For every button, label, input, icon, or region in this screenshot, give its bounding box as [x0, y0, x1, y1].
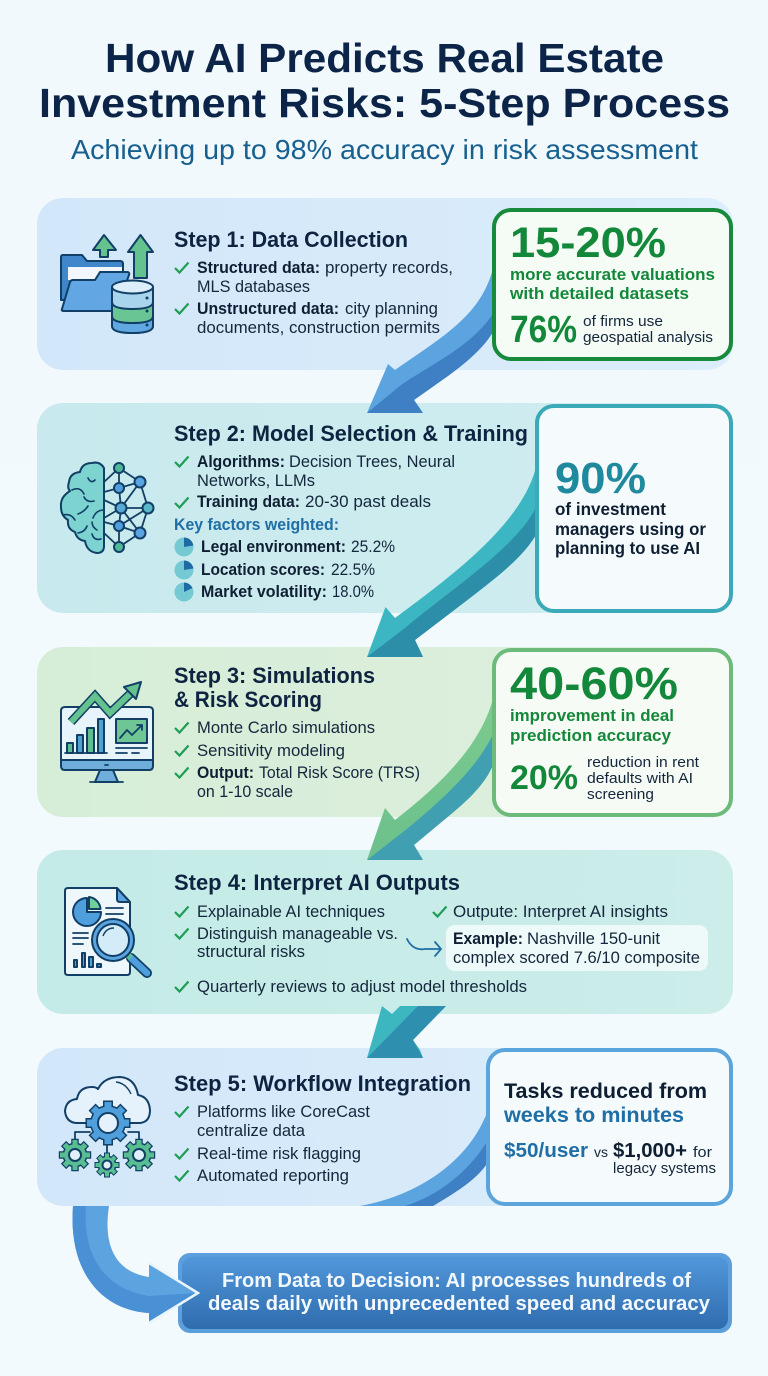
- bullet list: MLS databases: [197, 278, 310, 296]
- key factors list with pie icons: Legal environment:: [201, 538, 346, 556]
- bullet list: Total Risk Score (TRS): [259, 764, 420, 782]
- bullet list: Automated reporting: [197, 1167, 349, 1185]
- subtitle: Achieving up to 98% accuracy in risk assessment: [71, 134, 698, 165]
- callout: Nashville example: Example:: [453, 930, 523, 948]
- bullet list: Platforms like CoreCast: [197, 1103, 370, 1121]
- key factors list with pie icons: 22.5%: [331, 561, 375, 579]
- bullet list: Networks, LLMs: [197, 472, 315, 490]
- stat card: 15-20% valuations: 76%: [510, 309, 577, 351]
- icon: brain and neural network: [61, 463, 154, 553]
- heading: Step 4: Interpret AI Outputs: [174, 870, 460, 895]
- bullet list: [175, 1103, 370, 1185]
- panel: step 3 simulations: [37, 647, 733, 817]
- stat card: weeks to minutes: $1,000+: [613, 1140, 687, 1162]
- arrow: step 2 to step 3: [367, 463, 537, 657]
- bullet list: on 1-10 scale: [197, 783, 293, 801]
- bullet list: [175, 903, 668, 996]
- icon: report with magnifier: [65, 888, 147, 975]
- heading: & Risk Scoring: [174, 687, 322, 712]
- heading: Step 1: Data Collection: [174, 227, 408, 252]
- bullet list: Output:: [197, 764, 254, 782]
- arrow: step 3 to step 4: [367, 695, 494, 860]
- stat card: 90% of managers: [537, 406, 731, 611]
- bullet list: Quarterly reviews to adjust model thresholds: [197, 978, 527, 996]
- bullet list: Training data:: [197, 493, 300, 511]
- arrow: to example: [407, 939, 441, 956]
- key factors list with pie icons: Market volatility:: [201, 583, 327, 601]
- heading: Step 3: Simulations: [174, 663, 375, 688]
- bullet list: Sensitivity modeling: [197, 742, 345, 760]
- arrow: step 1 to step 2: [367, 265, 494, 413]
- stat card: weeks to minutes: Tasks reduced from: [504, 1079, 707, 1103]
- stat card: 40-60% prediction accuracy: screening: [587, 786, 654, 803]
- bullet list: Outpute: Interpret AI insights: [453, 903, 668, 921]
- bullet list: Distinguish manageable vs.: [197, 925, 398, 943]
- title: [39, 35, 730, 126]
- key factors list with pie icons: 18.0%: [332, 583, 374, 601]
- stat card: weeks to minutes: $50/user: [504, 1140, 588, 1162]
- stat card: 90% of managers: of investment: [555, 499, 666, 519]
- stat card: 40-60% prediction accuracy: prediction accuracy: [510, 726, 672, 745]
- bullet list: centralize data: [197, 1122, 306, 1140]
- callout: Nashville example: [446, 925, 708, 971]
- stat card: 15-20% valuations: of firms use: [583, 313, 663, 330]
- stat card: weeks to minutes: [488, 1050, 731, 1204]
- panel: step 4 interpret outputs: [37, 850, 733, 1014]
- stat card: weeks to minutes: vs: [594, 1144, 608, 1160]
- callout: Nashville example: Nashville 150-unit: [527, 930, 660, 948]
- stat card: 15-20% valuations: more accurate valuations: [510, 265, 715, 284]
- stat card: 40-60% prediction accuracy: 40-60%: [510, 658, 678, 709]
- conclusion banner: deals daily with unprecedented speed and accuracy: [208, 1292, 711, 1315]
- icon: monitor with growth chart: [61, 682, 153, 782]
- panel: step 1 data collection: [37, 198, 733, 370]
- stat card: weeks to minutes: for: [693, 1144, 712, 1161]
- bullet list: [175, 259, 453, 337]
- stat card: 90% of managers: 90%: [555, 454, 646, 503]
- stat card: 15-20% valuations: with detailed datasets: [509, 284, 689, 303]
- icon: folder, database and upload arrows: [61, 235, 153, 333]
- bullet list: property records,: [325, 259, 453, 277]
- bullet list: Decision Trees, Neural: [289, 453, 455, 471]
- stat card: 90% of managers: managers using or: [555, 519, 706, 539]
- stat card: 40-60% prediction accuracy: [494, 650, 731, 815]
- stat card: 40-60% prediction accuracy: reduction in rent: [587, 754, 700, 771]
- conclusion banner: [178, 1253, 732, 1333]
- stat card: 15-20% valuations: 15-20%: [510, 219, 666, 267]
- bullet list: Unstructured data:: [197, 300, 339, 318]
- heading: Step 5: Workflow Integration: [174, 1071, 471, 1096]
- key factors list with pie icons: [174, 538, 395, 602]
- stat card: 40-60% prediction accuracy: improvement in deal: [510, 706, 674, 725]
- callout: Nashville example: complex scored 7.6/10 composite: [453, 949, 700, 967]
- bullet list: structural risks: [197, 943, 305, 961]
- stat card: weeks to minutes: weeks to minutes: [503, 1103, 684, 1127]
- arrow: step 4 to step 5: [367, 1006, 446, 1058]
- bullet list: 20-30 past deals: [305, 493, 431, 511]
- bullet list: [175, 453, 455, 511]
- arrow: step 5 curve into card: [360, 1110, 488, 1206]
- bullet list: Algorithms:: [197, 453, 285, 471]
- key factors list with pie icons: 25.2%: [351, 538, 395, 556]
- title: Investment Risks: 5-Step Process: [39, 80, 730, 126]
- stat card: 15-20% valuations: geospatial analysis: [583, 329, 713, 346]
- key factors list with pie icons: Location scores:: [201, 561, 325, 579]
- heading: [174, 663, 375, 712]
- bullet list: Monte Carlo simulations: [197, 719, 375, 737]
- icon: cloud and gears: [59, 1077, 155, 1178]
- key factors heading: Key factors weighted:: [174, 516, 339, 534]
- panel: step 2 model selection: [37, 403, 733, 613]
- heading: Step 2: Model Selection & Training: [174, 421, 528, 446]
- panel: step 5 workflow integration: [37, 1048, 733, 1206]
- stat card: 90% of managers: planning to use AI: [555, 538, 700, 558]
- bullet list: documents, construction permits: [197, 319, 440, 337]
- bullet list: Real-time risk flagging: [197, 1145, 361, 1163]
- stat card: 40-60% prediction accuracy: defaults with AI: [587, 770, 693, 787]
- arrow: step 5 to conclusion: [72, 1206, 198, 1323]
- stat card: weeks to minutes: legacy systems: [613, 1160, 716, 1177]
- title: How AI Predicts Real Estate: [105, 35, 664, 81]
- stat card: 15-20% valuations: [494, 210, 731, 359]
- bullet list: Explainable AI techniques: [197, 903, 385, 921]
- bullet list: city planning: [345, 300, 438, 318]
- stat card: 40-60% prediction accuracy: 20%: [510, 759, 578, 797]
- bullet list: Structured data:: [197, 259, 320, 277]
- bullet list: [175, 719, 420, 801]
- conclusion banner: From Data to Decision: AI processes hundreds of: [222, 1269, 691, 1292]
